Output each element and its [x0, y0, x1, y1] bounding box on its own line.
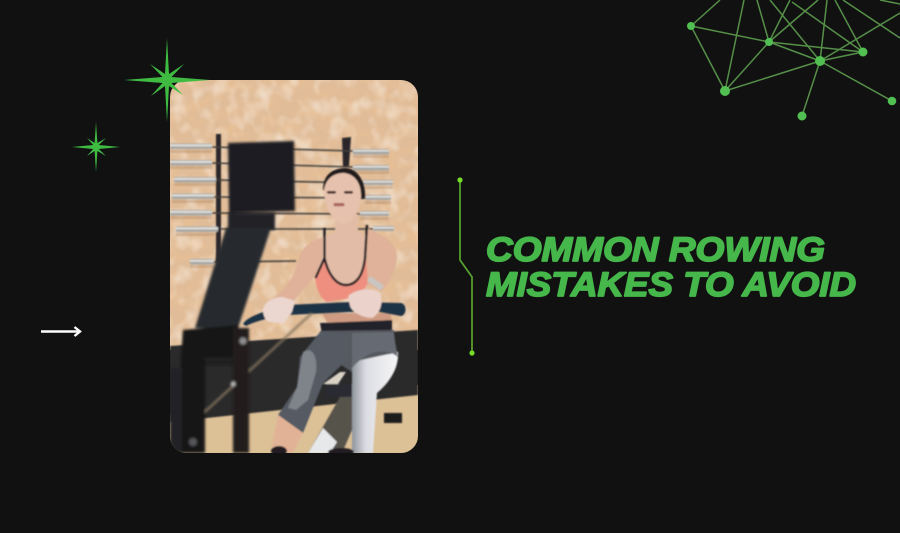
slide rail: [308, 397, 352, 453]
cable: [203, 311, 314, 414]
photo wall: [170, 80, 418, 350]
waistband: [319, 319, 393, 332]
right thigh patch: [352, 332, 398, 368]
title: MISTAKES TO AVOID: [486, 266, 856, 304]
title: COMMON ROWING: [486, 231, 825, 269]
wall barbell rack: [170, 134, 394, 268]
photo floor: [170, 385, 418, 453]
pelvis: [318, 330, 396, 372]
face: [324, 173, 361, 224]
sparkle star: small: [72, 122, 120, 172]
hair: [323, 168, 365, 200]
pink sports top: [315, 258, 368, 302]
arrow: [41, 327, 80, 336]
right leg: [352, 352, 398, 453]
eyes and lips: [327, 191, 336, 194]
rowing machine: [170, 141, 312, 453]
rowing handle and hands: [243, 276, 406, 326]
torso and neck: [320, 213, 367, 289]
left leg: [278, 332, 350, 433]
left arm: [276, 238, 322, 300]
photo: woman on rowing machine: [170, 80, 418, 456]
shoes: [271, 446, 287, 456]
photo floor mat: [170, 330, 418, 422]
midriff: [322, 313, 392, 325]
rail: [195, 228, 271, 328]
left knee highlight: [288, 350, 316, 410]
network graphic: [687, 0, 900, 120]
calf: [272, 415, 303, 453]
woman: [268, 168, 402, 456]
right arm: [366, 228, 397, 292]
title: [486, 231, 856, 304]
front legs: [181, 358, 205, 453]
monitor arm: [228, 213, 275, 230]
monitor: [228, 141, 295, 213]
seat: [323, 372, 346, 384]
top straps: [316, 225, 367, 285]
connector line with dots: [457, 177, 475, 356]
sparkle star: large: [124, 38, 210, 122]
rail block: [181, 325, 242, 358]
